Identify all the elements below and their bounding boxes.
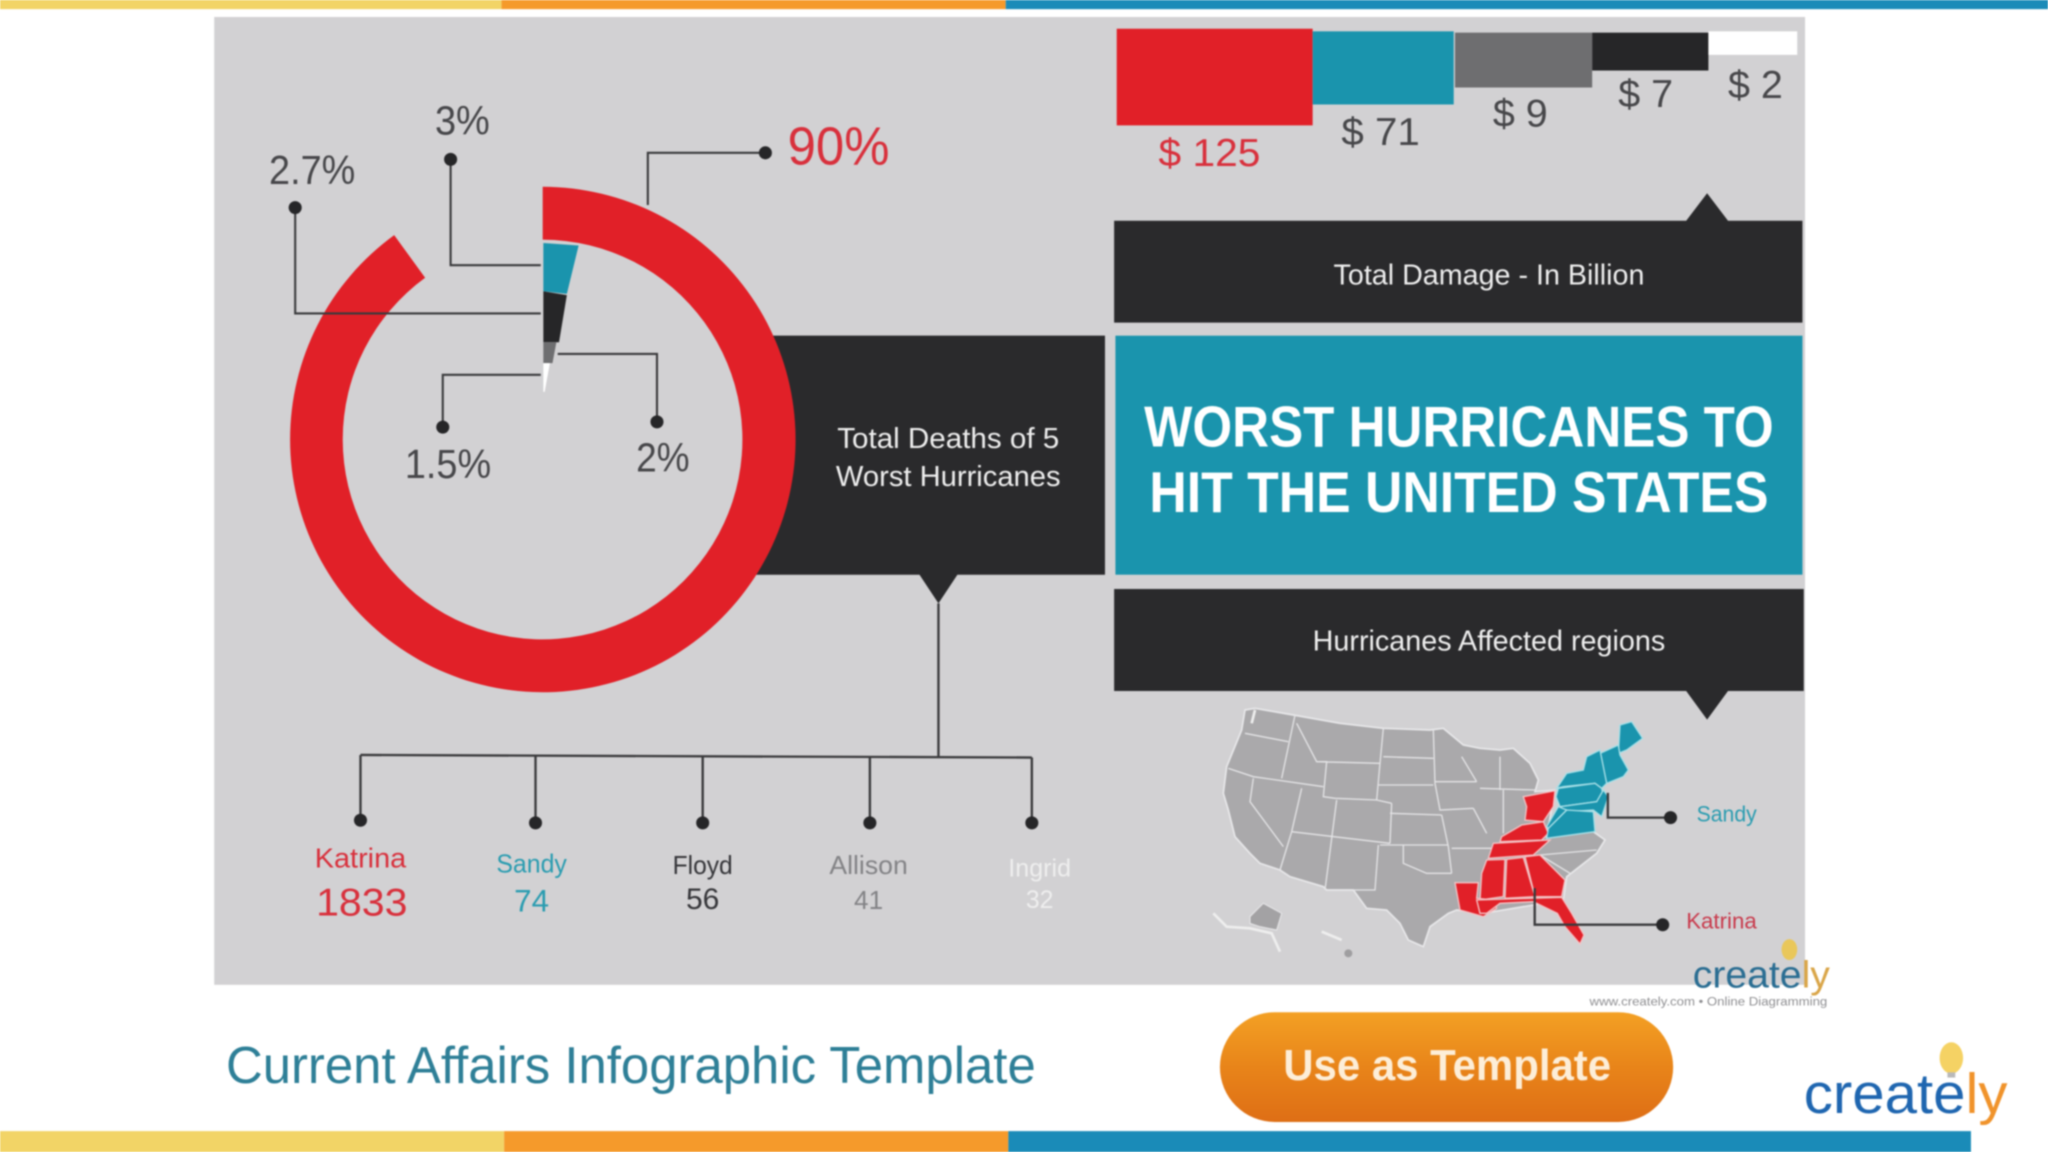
label: Floyd deaths: Floyd [673, 850, 733, 880]
donut chart: share of deaths [290, 187, 796, 692]
callout: 1.5% [405, 375, 541, 487]
US map of affected states [1213, 708, 1643, 957]
panel: deaths black label box [744, 336, 1105, 603]
label: Sandy deaths: 74 [514, 884, 549, 919]
callout: 2.7%: 2.7% [269, 147, 355, 193]
footer heading: Current Affairs Infographic Template [226, 1037, 1036, 1095]
title banner [1115, 336, 1802, 575]
label: Floyd deaths [673, 850, 733, 916]
label: Allison deaths [829, 850, 908, 915]
banner: total damage [1114, 193, 1802, 323]
callout: 2% [558, 354, 690, 481]
watermark: creately: creately [1693, 954, 1830, 996]
callout: 90%: 90% [788, 118, 889, 177]
callout: 2.7% [269, 147, 541, 313]
map: Katrina states in red [1455, 791, 1584, 944]
bar values: $ 7 [1618, 73, 1673, 116]
title banner: HIT THE UNITED STATES [1149, 461, 1768, 525]
callout: 2%: 2% [636, 435, 690, 481]
label: Allison deaths: Allison [829, 850, 908, 880]
bar values: $ 9 [1493, 93, 1548, 136]
logo: creately: creately [1804, 1062, 2008, 1125]
label: total deaths: Total Deaths of 5 [837, 423, 1059, 455]
infographic panel background [214, 17, 1805, 985]
label: total deaths: Worst Hurricanes [836, 461, 1061, 493]
title banner: WORST HURRICANES TO [1144, 396, 1774, 460]
map: Sandy states in teal [1547, 722, 1643, 838]
label: Ingrid deaths: Ingrid [1008, 855, 1071, 882]
banner: affected regions: Hurricanes Affected regions [1313, 625, 1665, 657]
callout: Sandy region: Sandy [1697, 802, 1758, 827]
label: Floyd deaths: 56 [686, 883, 719, 916]
banner: total damage: Total Damage - In Billion [1334, 260, 1644, 292]
bar values: $ 2 [1728, 64, 1783, 107]
label: Allison deaths: 41 [854, 885, 883, 915]
bar values [1159, 64, 1783, 175]
label: Katrina deaths: 1833 [316, 882, 408, 925]
callout: 3%: 3% [435, 98, 490, 144]
label: total deaths [836, 423, 1061, 493]
label: Ingrid deaths [1008, 855, 1071, 914]
label: Katrina deaths: Katrina [315, 842, 407, 873]
watermark: creately: www.creately.com • Online Diagramming [1588, 996, 1827, 1009]
callout: Katrina region: Katrina [1686, 909, 1757, 934]
button: use as template: Use as Template [1283, 1042, 1611, 1090]
map: grey states [1213, 708, 1605, 957]
watermark: creately [1588, 939, 1830, 1009]
label: Ingrid deaths: 32 [1026, 887, 1053, 914]
callout: 1.5%: 1.5% [405, 441, 491, 487]
label: Sandy deaths [496, 848, 567, 919]
callout: Sandy region [1608, 793, 1758, 827]
bar values: $ 125 [1159, 132, 1260, 175]
stepped bar chart: damage in billions [1117, 29, 1797, 175]
bottom colour band [0, 1131, 1971, 1152]
banner: affected regions [1114, 589, 1804, 720]
label: Katrina deaths [315, 842, 408, 925]
callout: Katrina region [1535, 888, 1757, 934]
callout: 3% [435, 98, 541, 265]
callout: 90% [648, 118, 889, 205]
tree connector: hurricanes [354, 603, 1038, 829]
bar values: $ 71 [1341, 111, 1420, 154]
top colour band [0, 0, 2048, 9]
label: Sandy deaths: Sandy [496, 848, 567, 878]
button: use as template [1220, 1012, 1673, 1122]
